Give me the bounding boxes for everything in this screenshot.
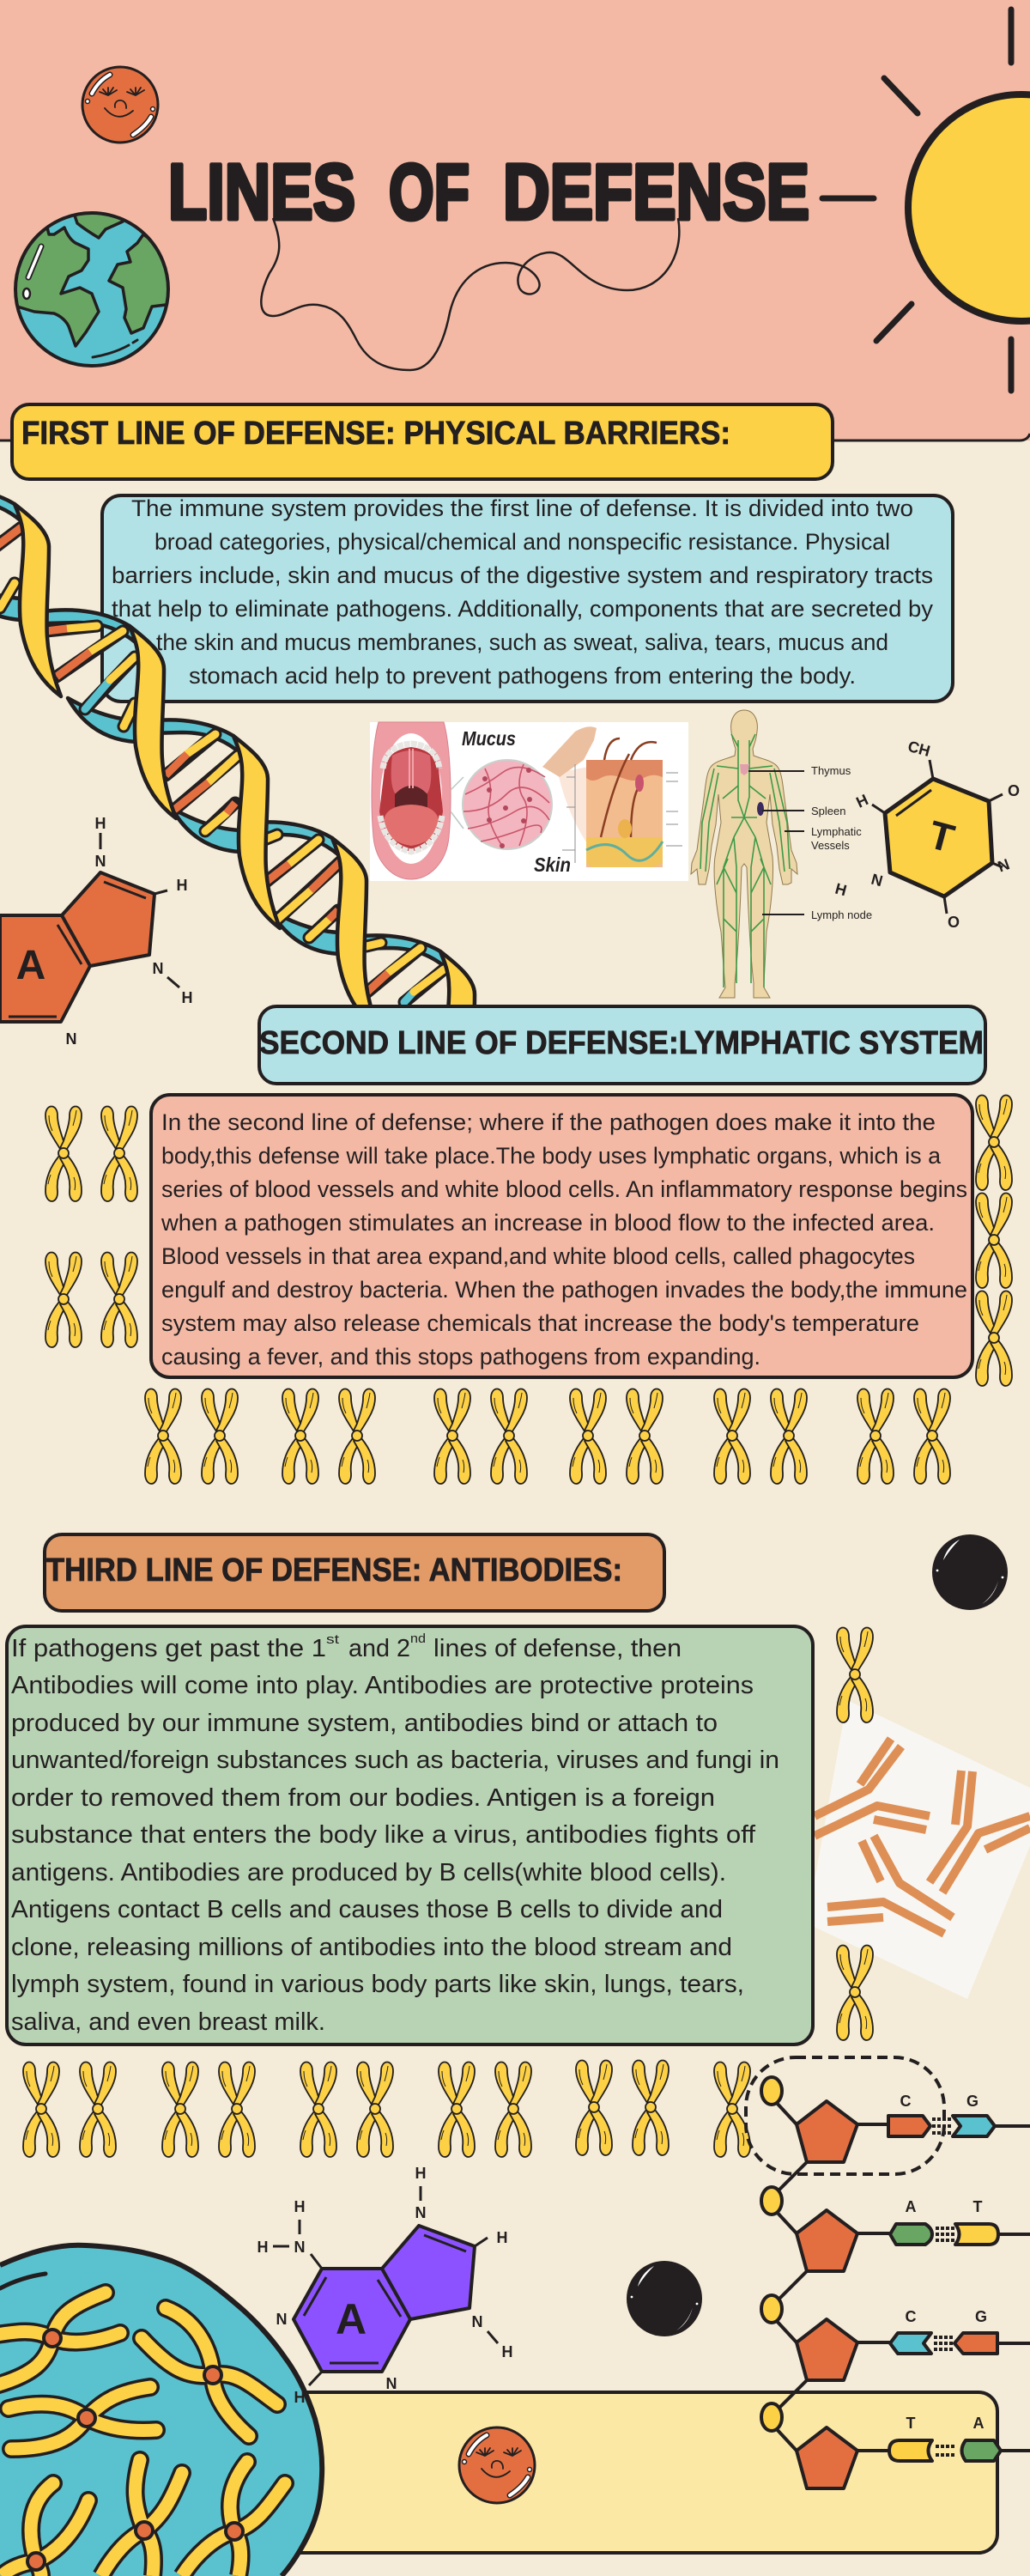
molecule: purple adenine: N — [276, 2311, 287, 2328]
panel: third line text: saliva, and even breast milk. — [11, 2008, 325, 2036]
panel: first line text: that help to eliminate pathogens. Additionally, components that are secreted by — [112, 596, 933, 622]
molecule: purple adenine — [258, 2165, 513, 2406]
icon: black ball lower — [627, 2261, 702, 2336]
molecule: orange adenine: H — [177, 877, 187, 894]
molecule: purple adenine: H — [294, 2198, 306, 2215]
DNA backbone nucleotides: T — [906, 2415, 915, 2432]
panel: second line text: Blood vessels in that area expand,and white blood cells, called phagocytes — [161, 1243, 915, 1269]
diagram: lymphatic system body — [691, 710, 872, 998]
title: LINES — [168, 149, 355, 236]
panel: third line text: and 2 — [348, 1635, 410, 1662]
panel: third line text: unwanted/foreign substances such as bacteria, viruses and fungi in — [11, 1747, 779, 1774]
molecule: purple adenine: N — [386, 2375, 397, 2392]
molecule: thymine — [833, 738, 1020, 931]
panel: third line text: antigens. Antibodies are produced by B cells(white blood cells). — [11, 1859, 726, 1886]
heading: second line of defense — [259, 1006, 985, 1084]
molecule: thymine: CH — [906, 738, 932, 760]
molecule: thymine: H — [853, 791, 871, 811]
image: mucus and skin: Mucus — [462, 727, 516, 750]
DNA backbone nucleotides: A — [905, 2198, 917, 2215]
icon: sun with rays — [822, 9, 1030, 391]
header band — [0, 0, 1030, 440]
panel: second line text: causing a fever, and this stops pathogens from expanding. — [161, 1344, 760, 1370]
molecule: purple adenine: A — [336, 2295, 367, 2343]
panel: second line text: system may also release chemicals that increase the body's temperature — [161, 1310, 919, 1336]
DNA backbone nucleotides: C — [900, 2093, 912, 2110]
chromosome row under second panel — [145, 1389, 950, 1484]
chromosome row under third panel — [23, 2061, 750, 2157]
heading: second line of defense: SECOND LINE OF DEFENSE:LYMPHATIC SYSTEM — [259, 1025, 984, 1061]
title — [168, 149, 809, 236]
molecule: thymine: T — [924, 811, 959, 861]
panel: first line text: barriers include, skin and mucus of the digestive system and respiratory tracts — [112, 562, 933, 588]
molecule: purple adenine: H — [294, 2389, 306, 2406]
panel: second line text: series of blood vessels and white blood cells. An inflammatory response begins — [161, 1176, 967, 1202]
panel: third line text: Antibodies will come into play. Antibodies are protective proteins — [11, 1672, 754, 1699]
chromosomes right of second panel — [976, 1096, 1012, 1386]
panel: second line text: when a pathogen stimulates an increase in blood flow to the infected area. — [161, 1210, 935, 1236]
panel: second line text: In the second line of defense; where if the pathogen does make it into the — [161, 1109, 936, 1135]
molecule: thymine: O — [1008, 782, 1020, 799]
heading: first line of defense: FIRST LINE OF DEFENSE: PHYSICAL BARRIERS: — [21, 416, 730, 452]
molecule: purple adenine: N — [472, 2313, 482, 2330]
heading: third line of defense: THIRD LINE OF DEFENSE: ANTIBODIES: — [46, 1552, 622, 1589]
panel: third line text: nd — [410, 1631, 426, 1646]
panel: first line text: broad categories, physical/chemical and nonspecific resistance. Physical — [154, 529, 890, 555]
diagram: lymphatic system body: Lymph node — [811, 908, 872, 921]
skin cross section — [542, 726, 682, 867]
diagram: lymphatic system body: Spleen — [811, 805, 845, 817]
DNA backbone nucleotides: A — [973, 2415, 984, 2432]
molecule: purple adenine: H — [258, 2239, 268, 2256]
diagram: lymphatic system body: Thymus — [811, 764, 851, 777]
panel: third line text: produced by our immune system, antibodies bind or attach to — [11, 1710, 718, 1737]
diagram: lymphatic system body: Lymphatic — [811, 825, 862, 838]
panel: first line text: The immune system provides the first line of defense. It is divided into two — [131, 495, 913, 521]
molecule: orange adenine: N — [94, 853, 106, 870]
panel: third line text: clone, releasing millions of antibodies into the blood stream and — [11, 1934, 732, 1961]
panel: third line text: Antigens contact B cells and causes those B cells to divide and — [11, 1896, 723, 1923]
molecule: purple adenine: N — [415, 2204, 426, 2221]
bottom yellow rounded panel — [172, 2392, 997, 2553]
title: DEFENSE — [503, 149, 809, 236]
DNA backbone nucleotides: G — [966, 2093, 978, 2110]
heading: third line of defense — [45, 1534, 664, 1611]
molecule: purple adenine: H — [496, 2229, 508, 2246]
DNA backbone nucleotides: T — [973, 2198, 982, 2215]
molecule: purple adenine: H — [415, 2165, 426, 2182]
molecule: orange adenine: H — [182, 989, 192, 1006]
panel: third line text: order to removed them from our bodies. Antigen is a foreign — [11, 1784, 715, 1812]
panel: second line text: body,this defense will take place.The body uses lymphatic organs, which is a — [161, 1143, 942, 1169]
image: antibodies on white card — [807, 1700, 1030, 1999]
molecule: orange adenine: H — [94, 815, 106, 832]
image: mucus and skin: Skin — [534, 854, 571, 876]
icon: smiling orange planet lower — [459, 2427, 535, 2503]
DNA backbone nucleotides — [761, 2077, 1030, 2488]
panel: second line text: engulf and destroy bacteria. When the pathogen invades the body,the immune — [161, 1277, 967, 1303]
icon: earth — [14, 211, 170, 368]
panel: first line text — [102, 495, 953, 702]
chromosomes right of third panel — [837, 1628, 873, 2040]
panel: third line text — [7, 1626, 813, 2044]
molecule: orange adenine: N — [153, 960, 163, 977]
panel: third line text: st — [326, 1632, 340, 1647]
panel: third line text: If pathogens get past the 1 — [11, 1635, 326, 1662]
heading: first line of defense — [12, 404, 833, 479]
icon: black ball top — [932, 1534, 1008, 1610]
decorative squiggle — [261, 218, 679, 370]
molecule: thymine: O — [948, 914, 960, 931]
molecule: orange adenine: N — [65, 1030, 77, 1048]
molecule: thymine: N — [869, 871, 885, 890]
image: mucus and skin — [370, 722, 688, 881]
panel: first line text: stomach acid help to prevent pathogens from entering the body. — [189, 663, 856, 689]
molecule: thymine: N — [996, 855, 1012, 876]
diagram: lymphatic system body: Vessels — [811, 839, 850, 852]
DNA backbone nucleotides: C — [905, 2308, 917, 2325]
dashed highlight around first nucleotide — [746, 2057, 944, 2174]
icon: smiling orange planet — [82, 67, 158, 143]
chromosomes left of second panel — [45, 1106, 137, 1347]
mouth — [372, 722, 451, 879]
panel: third line text: lines of defense, then — [433, 1635, 682, 1662]
molecule: orange adenine: A — [16, 943, 45, 988]
panel: third line text: lymph system, found in various body parts like skin, lungs, tears, — [11, 1971, 744, 1998]
panel: second line text — [151, 1095, 972, 1377]
title: OF — [389, 149, 470, 236]
panel: third line text: substance that enters the body like a virus, antibodies fights off — [11, 1821, 756, 1849]
panel: first line text: the skin and mucus membranes, such as sweat, saliva, tears, mucus and — [156, 629, 888, 655]
molecule: thymine: H — [833, 880, 849, 899]
skin cell circle — [451, 760, 552, 849]
DNA backbone nucleotides: G — [975, 2308, 987, 2325]
big teal cell with chromosomes — [0, 2245, 322, 2576]
molecule: purple adenine: N — [294, 2239, 306, 2256]
DNA double helix — [0, 488, 487, 1144]
molecule: purple adenine: H — [501, 2343, 513, 2360]
molecule: orange adenine — [0, 815, 192, 1048]
